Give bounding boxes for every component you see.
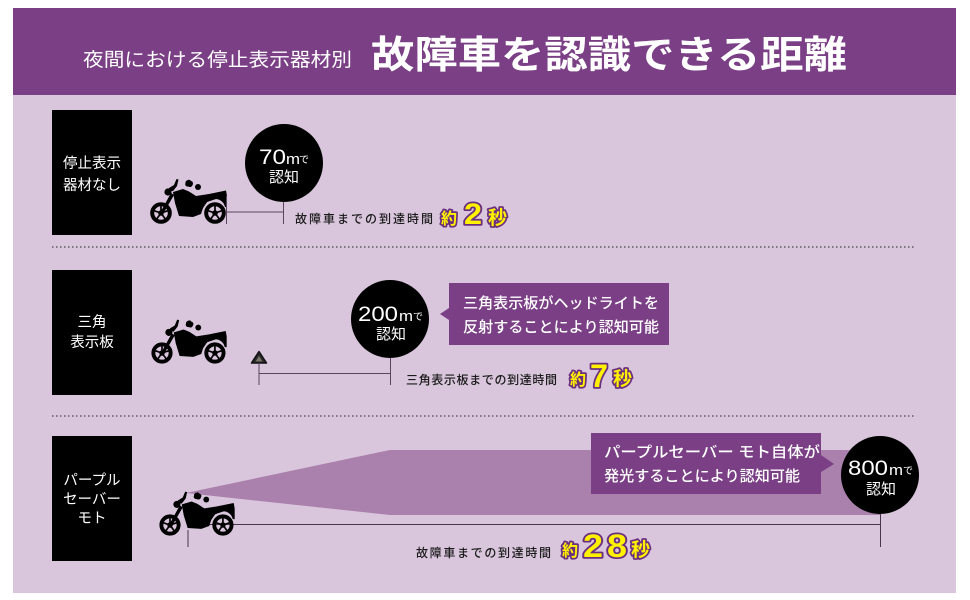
callout: self-luminous: パープルセーバー モト自体が xyxy=(604,443,820,461)
distance line 3 xyxy=(188,510,880,547)
callout: triangle reflects xyxy=(440,283,669,345)
label box: no device: 器材なし xyxy=(63,177,121,194)
arrival time 1: 故障車までの到達時間 xyxy=(295,211,433,226)
arrival time 1: 約 xyxy=(441,210,457,228)
label box: purple saver: セーバー xyxy=(63,492,121,508)
arrival time 2: 約 xyxy=(570,371,586,389)
icon: motorcycle 3 xyxy=(161,492,235,534)
callout: self-luminous: 発光することにより認知可能 xyxy=(604,468,800,485)
arrival time 1: 2 xyxy=(464,198,482,231)
arrival time 2: 三角表示板までの到達時間 xyxy=(406,372,557,387)
distance circle 800m xyxy=(841,436,919,514)
arrival time 3: 約 xyxy=(562,542,578,560)
label box: triangle: 三角 xyxy=(78,314,106,331)
distance circle 800m: m xyxy=(889,462,903,479)
distance circle 200m: で xyxy=(413,312,423,323)
distance circle 200m xyxy=(351,280,429,358)
label box: triangle xyxy=(52,270,132,395)
callout: self-luminous xyxy=(591,433,834,494)
arrival time 3: 2 xyxy=(583,528,603,564)
distance line 1 xyxy=(226,196,284,224)
distance circle 800m: で xyxy=(903,466,913,477)
callout: triangle reflects: 三角表示板がヘッドライトを xyxy=(463,294,659,312)
arrival time 1: 秒 xyxy=(488,207,507,229)
distance circle 200m: 200 xyxy=(358,303,398,326)
distance circle 800m: 認知 xyxy=(866,481,896,498)
distance circle 70m: m xyxy=(286,151,300,168)
header band xyxy=(13,8,956,95)
distance circle 70m: 認知 xyxy=(269,169,299,186)
label box: purple saver: パープル xyxy=(63,472,121,489)
arrival time 3: 故障車までの到達時間 xyxy=(416,545,551,560)
arrival time 3: 秒 xyxy=(631,539,650,561)
distance circle 200m: 認知 xyxy=(376,326,406,343)
distance circle 800m: 800 xyxy=(848,457,888,480)
distance circle 70m: で xyxy=(299,155,309,166)
label box: no device xyxy=(52,110,132,235)
row 1: no device xyxy=(52,110,507,235)
icon: motorcycle 2 xyxy=(153,320,227,362)
distance circle 200m: m xyxy=(399,308,413,325)
callout: triangle reflects: 反射することにより認知可能 xyxy=(463,319,659,336)
arrival time 1 xyxy=(295,198,507,231)
title: 故障車を認識できる距離 xyxy=(371,35,847,77)
label box: purple saver xyxy=(52,436,132,561)
arrival time 3: 8 xyxy=(607,528,627,564)
distance line 2 xyxy=(259,352,390,385)
label box: triangle: 表示板 xyxy=(70,334,114,351)
row 3: purple saver xyxy=(52,433,919,564)
label box: purple saver: モト xyxy=(78,511,106,527)
label box: no device: 停止表示 xyxy=(63,155,121,172)
arrival time 2: 7 xyxy=(590,358,608,394)
icon: motorcycle 1 xyxy=(152,179,227,222)
distance circle 70m: 70 xyxy=(259,146,286,169)
subtitle: 夜間における停止表示器材別 xyxy=(83,49,352,71)
row 2: triangle board xyxy=(52,270,669,395)
arrival time 3 xyxy=(416,528,650,564)
arrival time 2: 秒 xyxy=(613,368,632,390)
icon: warning triangle xyxy=(252,352,266,363)
distance circle 70m xyxy=(245,124,323,202)
light beam xyxy=(186,450,880,515)
arrival time 2 xyxy=(406,358,632,394)
